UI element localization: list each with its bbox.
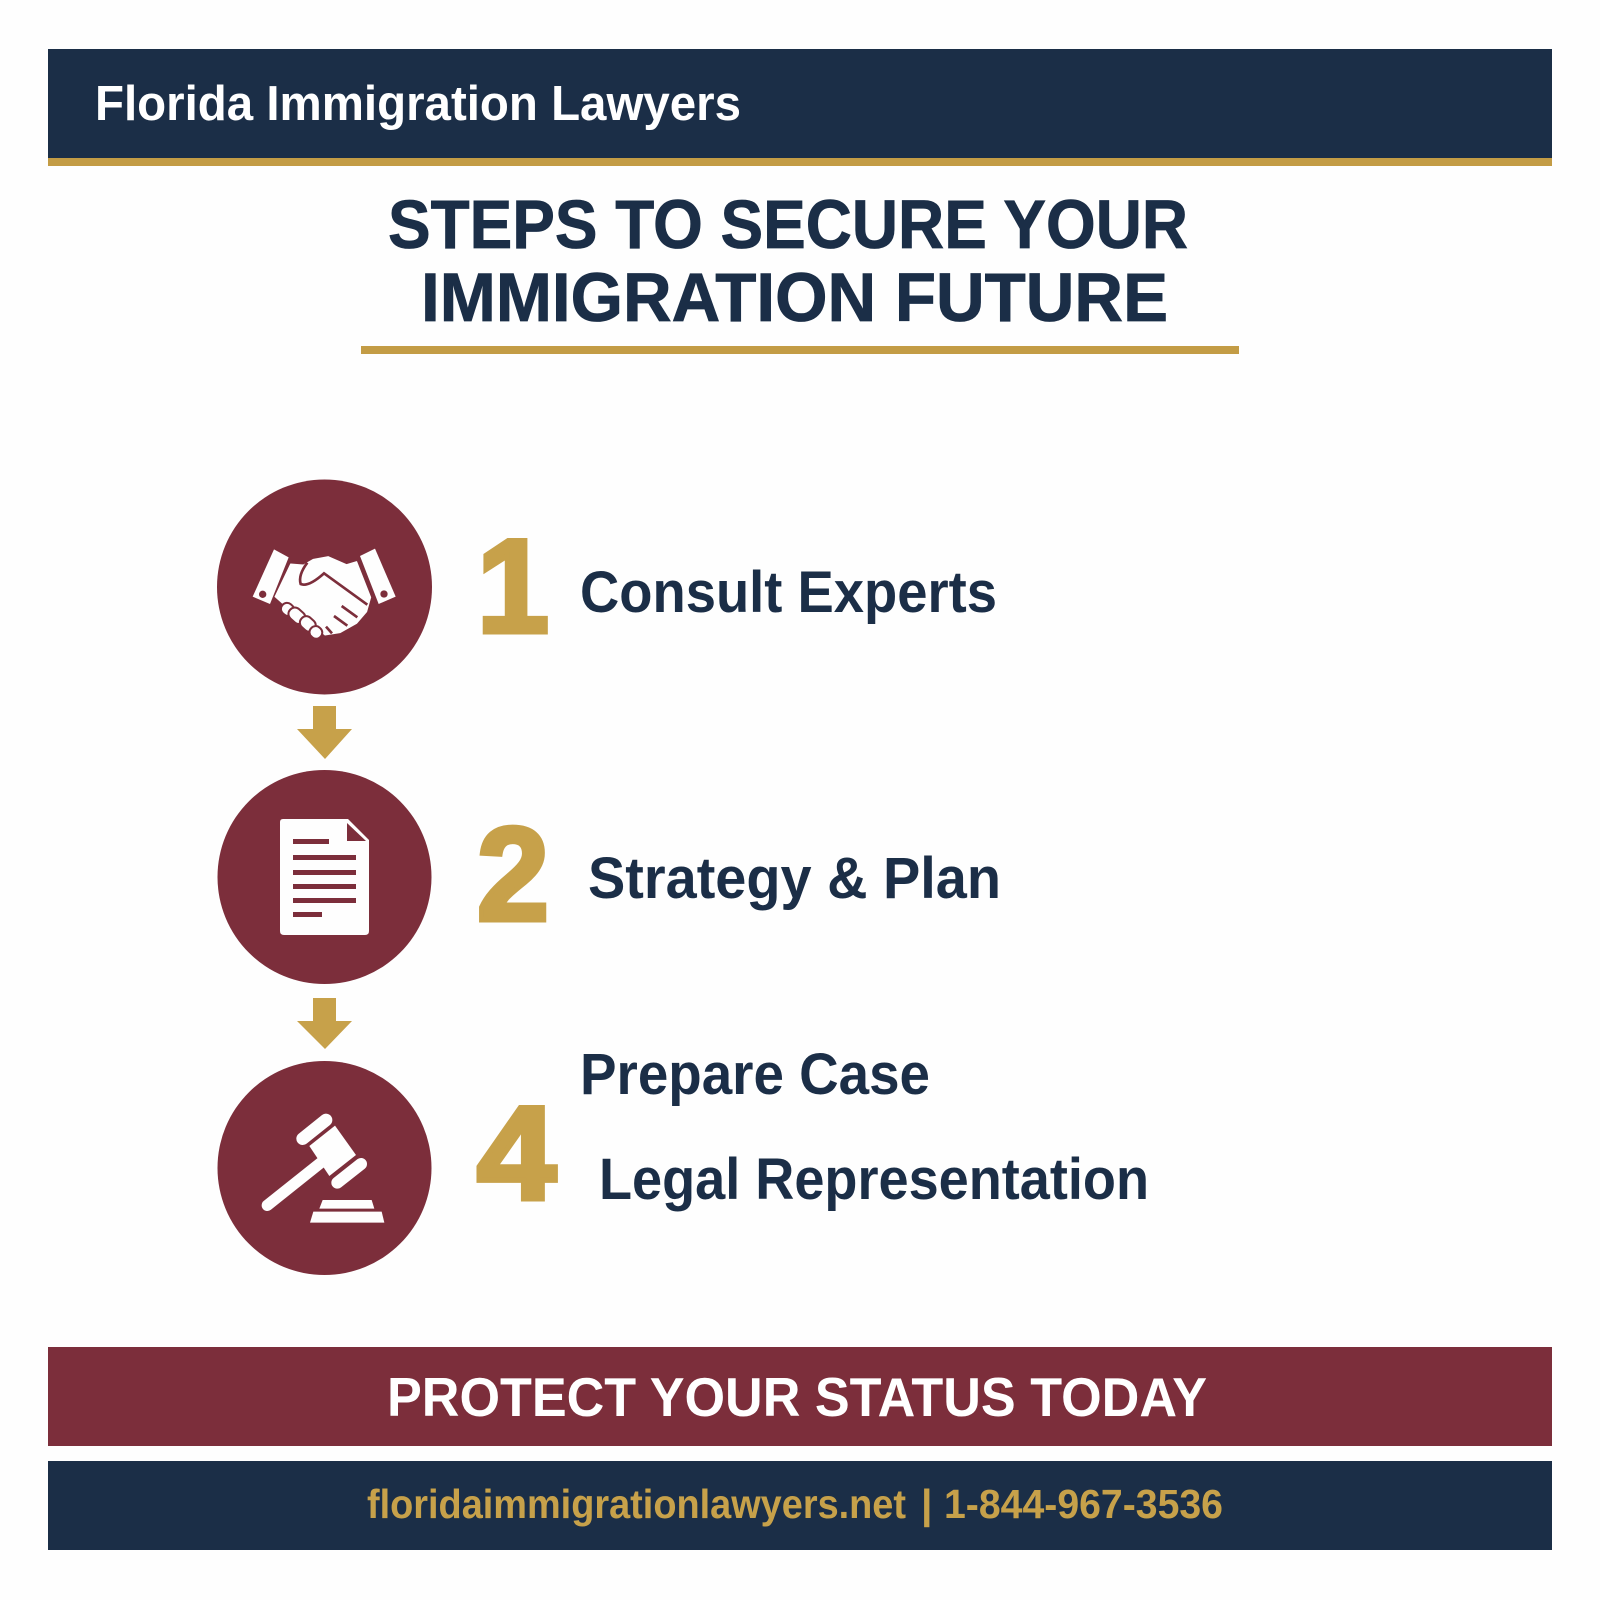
title: IMMIGRATION FUTURE xyxy=(421,259,1168,336)
step label: prepare case: Prepare Case xyxy=(580,1042,930,1107)
call to action banner xyxy=(48,1347,1552,1446)
step label: legal representation: Legal Representation xyxy=(599,1147,1149,1212)
icon: document xyxy=(218,770,432,984)
number 2: 2 xyxy=(477,801,549,949)
icon: gavel xyxy=(218,1061,432,1275)
separator: | xyxy=(921,1481,932,1527)
phone number: 1-844-967-3536 xyxy=(944,1481,1223,1527)
step label: Consult Experts xyxy=(580,560,997,625)
website: floridaimmigrationlawyers.net xyxy=(367,1481,906,1527)
title: STEPS TO SECURE YOUR xyxy=(388,186,1188,263)
number 1: 1 xyxy=(477,513,549,661)
step 1: consult experts xyxy=(217,480,997,694)
header brand name: Florida Immigration Lawyers xyxy=(95,77,741,131)
step 2: strategy and plan xyxy=(218,770,1001,984)
number 4: 4 xyxy=(477,1080,556,1228)
step label: Strategy & Plan xyxy=(588,846,1001,911)
header bar xyxy=(48,49,1552,166)
contact bar xyxy=(48,1461,1552,1550)
arrow: step 2 to step 3 xyxy=(297,998,352,1049)
call to action banner: PROTECT YOUR STATUS TODAY xyxy=(387,1366,1207,1428)
step 3: prepare case and legal representation xyxy=(218,1042,1149,1275)
arrow: step 1 to step 2 xyxy=(297,706,352,759)
title xyxy=(361,186,1239,354)
icon: handshake xyxy=(217,480,432,694)
